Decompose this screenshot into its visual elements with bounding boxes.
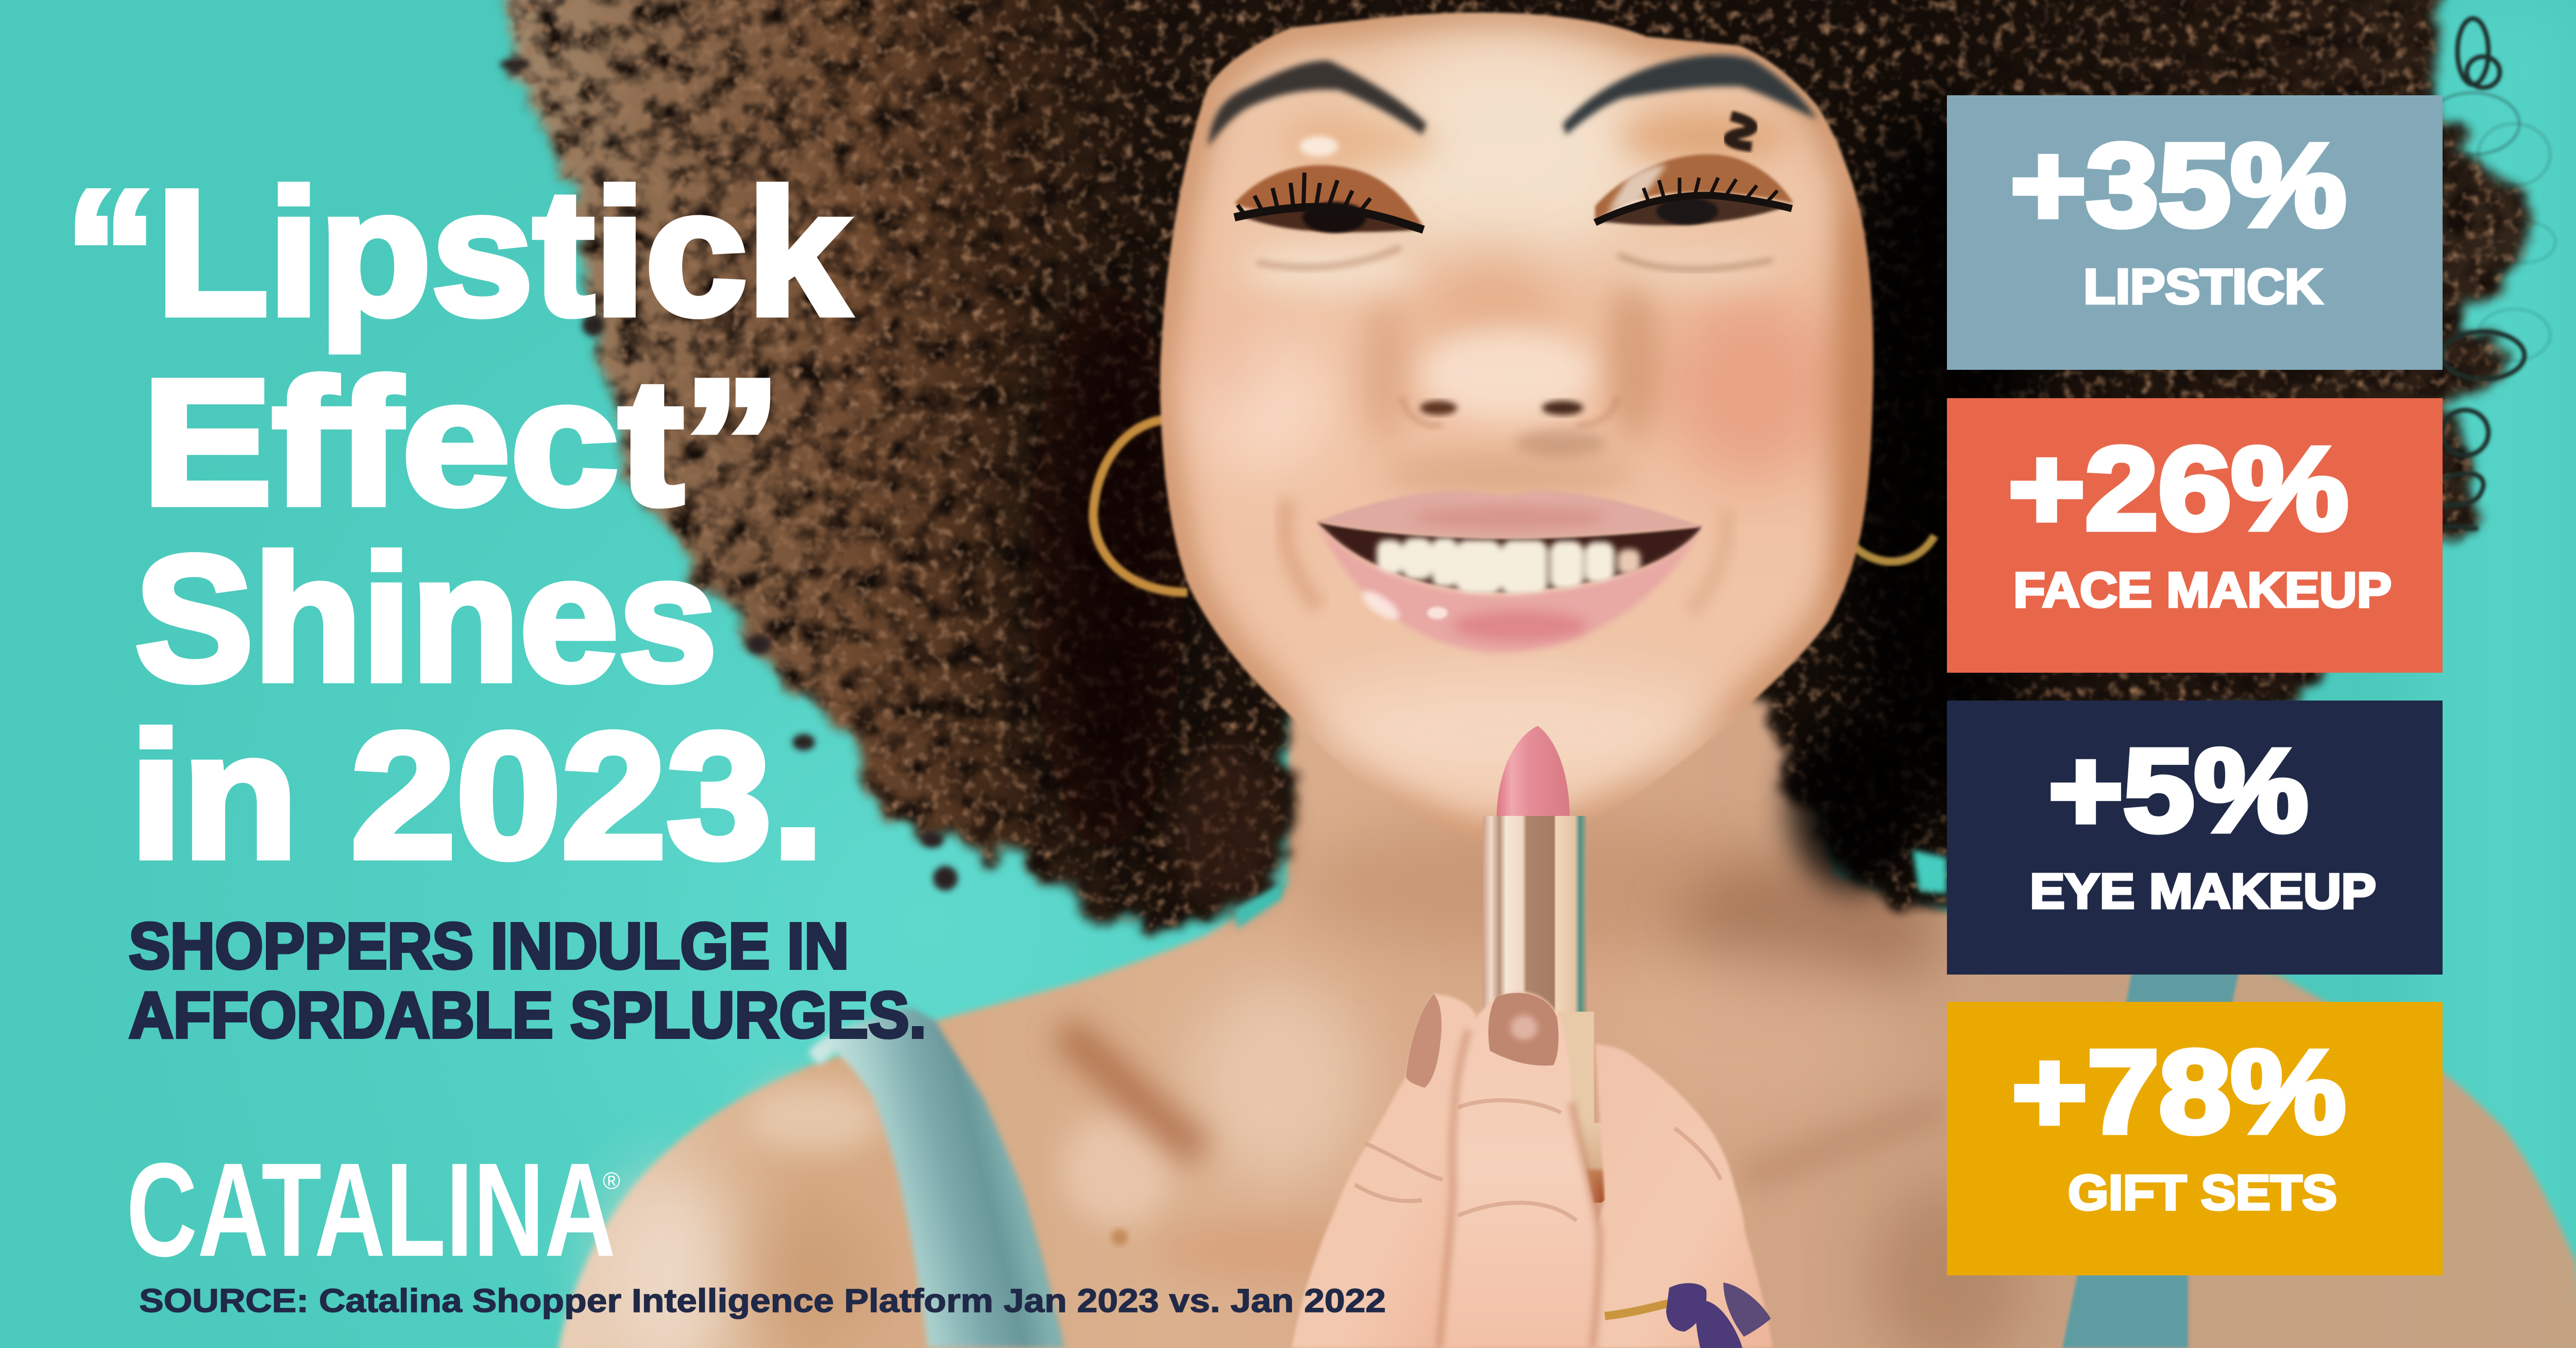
stat card: face makeup +26% [1947, 398, 2443, 673]
stat card: face makeup +26%: FACE MAKEUP [2013, 562, 2392, 618]
stat card: lipstick +35%: LIPSTICK [2083, 259, 2323, 314]
finger shadows [1439, 1030, 1599, 1348]
stat card: gift sets +78% [1947, 1002, 2443, 1275]
logo: Catalina: CATALINA [126, 1135, 616, 1284]
face [1158, 10, 1875, 832]
logo: Catalina: ® [603, 1167, 620, 1194]
mouth [1317, 491, 1702, 653]
right eye [1595, 155, 1793, 225]
stat card: lipstick +35% [1947, 95, 2443, 370]
left top strap [808, 1009, 1064, 1348]
left earring [1093, 419, 1188, 592]
stat card: lipstick +35%: +35% [2010, 120, 2346, 251]
title: Lipstick Effect Shines in 2023: Shines [135, 519, 717, 718]
hair shadow behind face [1030, 103, 2040, 907]
thumb nail [1488, 993, 1558, 1066]
teeth [1377, 538, 1640, 596]
stat card: gift sets +78%: +78% [2012, 1027, 2346, 1157]
gold ring [1605, 1303, 1669, 1316]
right top strap [2062, 968, 2240, 1348]
hair: loose curls on the right [2427, 19, 2555, 528]
title: Lipstick Effect Shines in 2023: Effect” [142, 343, 781, 542]
lower lip [1317, 523, 1702, 653]
source line: SOURCE: Catalina Shopper Intelligence Platform Jan 2023 vs. Jan 2022 [139, 1282, 1386, 1319]
purple stone ring [1666, 1283, 1771, 1348]
eyebrows [1208, 55, 1817, 147]
subtitle: shoppers indulge: AFFORDABLE SPLURGES. [129, 979, 926, 1051]
hand holding lipstick [1292, 992, 1773, 1348]
under-eye creases [1257, 247, 1772, 269]
subtitle: shoppers indulge: SHOPPERS INDULGE IN [129, 910, 849, 982]
right earring [1855, 536, 1935, 561]
title: Lipstick Effect Shines in 2023 [65, 153, 850, 895]
body: neck and shoulders [557, 670, 2576, 1348]
index finger [1292, 994, 1476, 1348]
face shading [1160, 12, 1880, 840]
stat card: eye makeup +5% [1947, 701, 2443, 975]
teal gaps between hair and neck [1236, 850, 1947, 929]
stat card: eye makeup +5%: +5% [2048, 725, 2308, 856]
stat card: gift sets +78%: GIFT SETS [2068, 1165, 2337, 1220]
subtitle: shoppers indulge [129, 910, 926, 1051]
thumb [1439, 992, 1599, 1348]
stat card: face makeup +26%: +26% [2008, 423, 2348, 554]
nose [1401, 327, 1618, 456]
background: lighter teal on the right [2421, 0, 2576, 1348]
lipstick case [1483, 816, 1587, 1017]
hair [505, 0, 2530, 925]
finger creases [1355, 1100, 1721, 1221]
title: Lipstick Effect Shines in 2023: “Lipstick [65, 153, 850, 353]
lipstick bullet [1497, 726, 1570, 819]
title: Lipstick Effect Shines in 2023: in 2023. [130, 696, 824, 895]
curl over right eyebrow [1728, 116, 1753, 147]
body shading [603, 819, 2025, 1348]
right finger [1592, 1044, 1773, 1348]
stat card: eye makeup +5%: EYE MAKEUP [2030, 864, 2376, 919]
hair: stray curls at lower left [500, 59, 958, 891]
lipstick [1483, 726, 1605, 1203]
upper lip [1317, 491, 1702, 538]
left eye [1234, 136, 1423, 233]
index fingernail [1406, 994, 1442, 1088]
